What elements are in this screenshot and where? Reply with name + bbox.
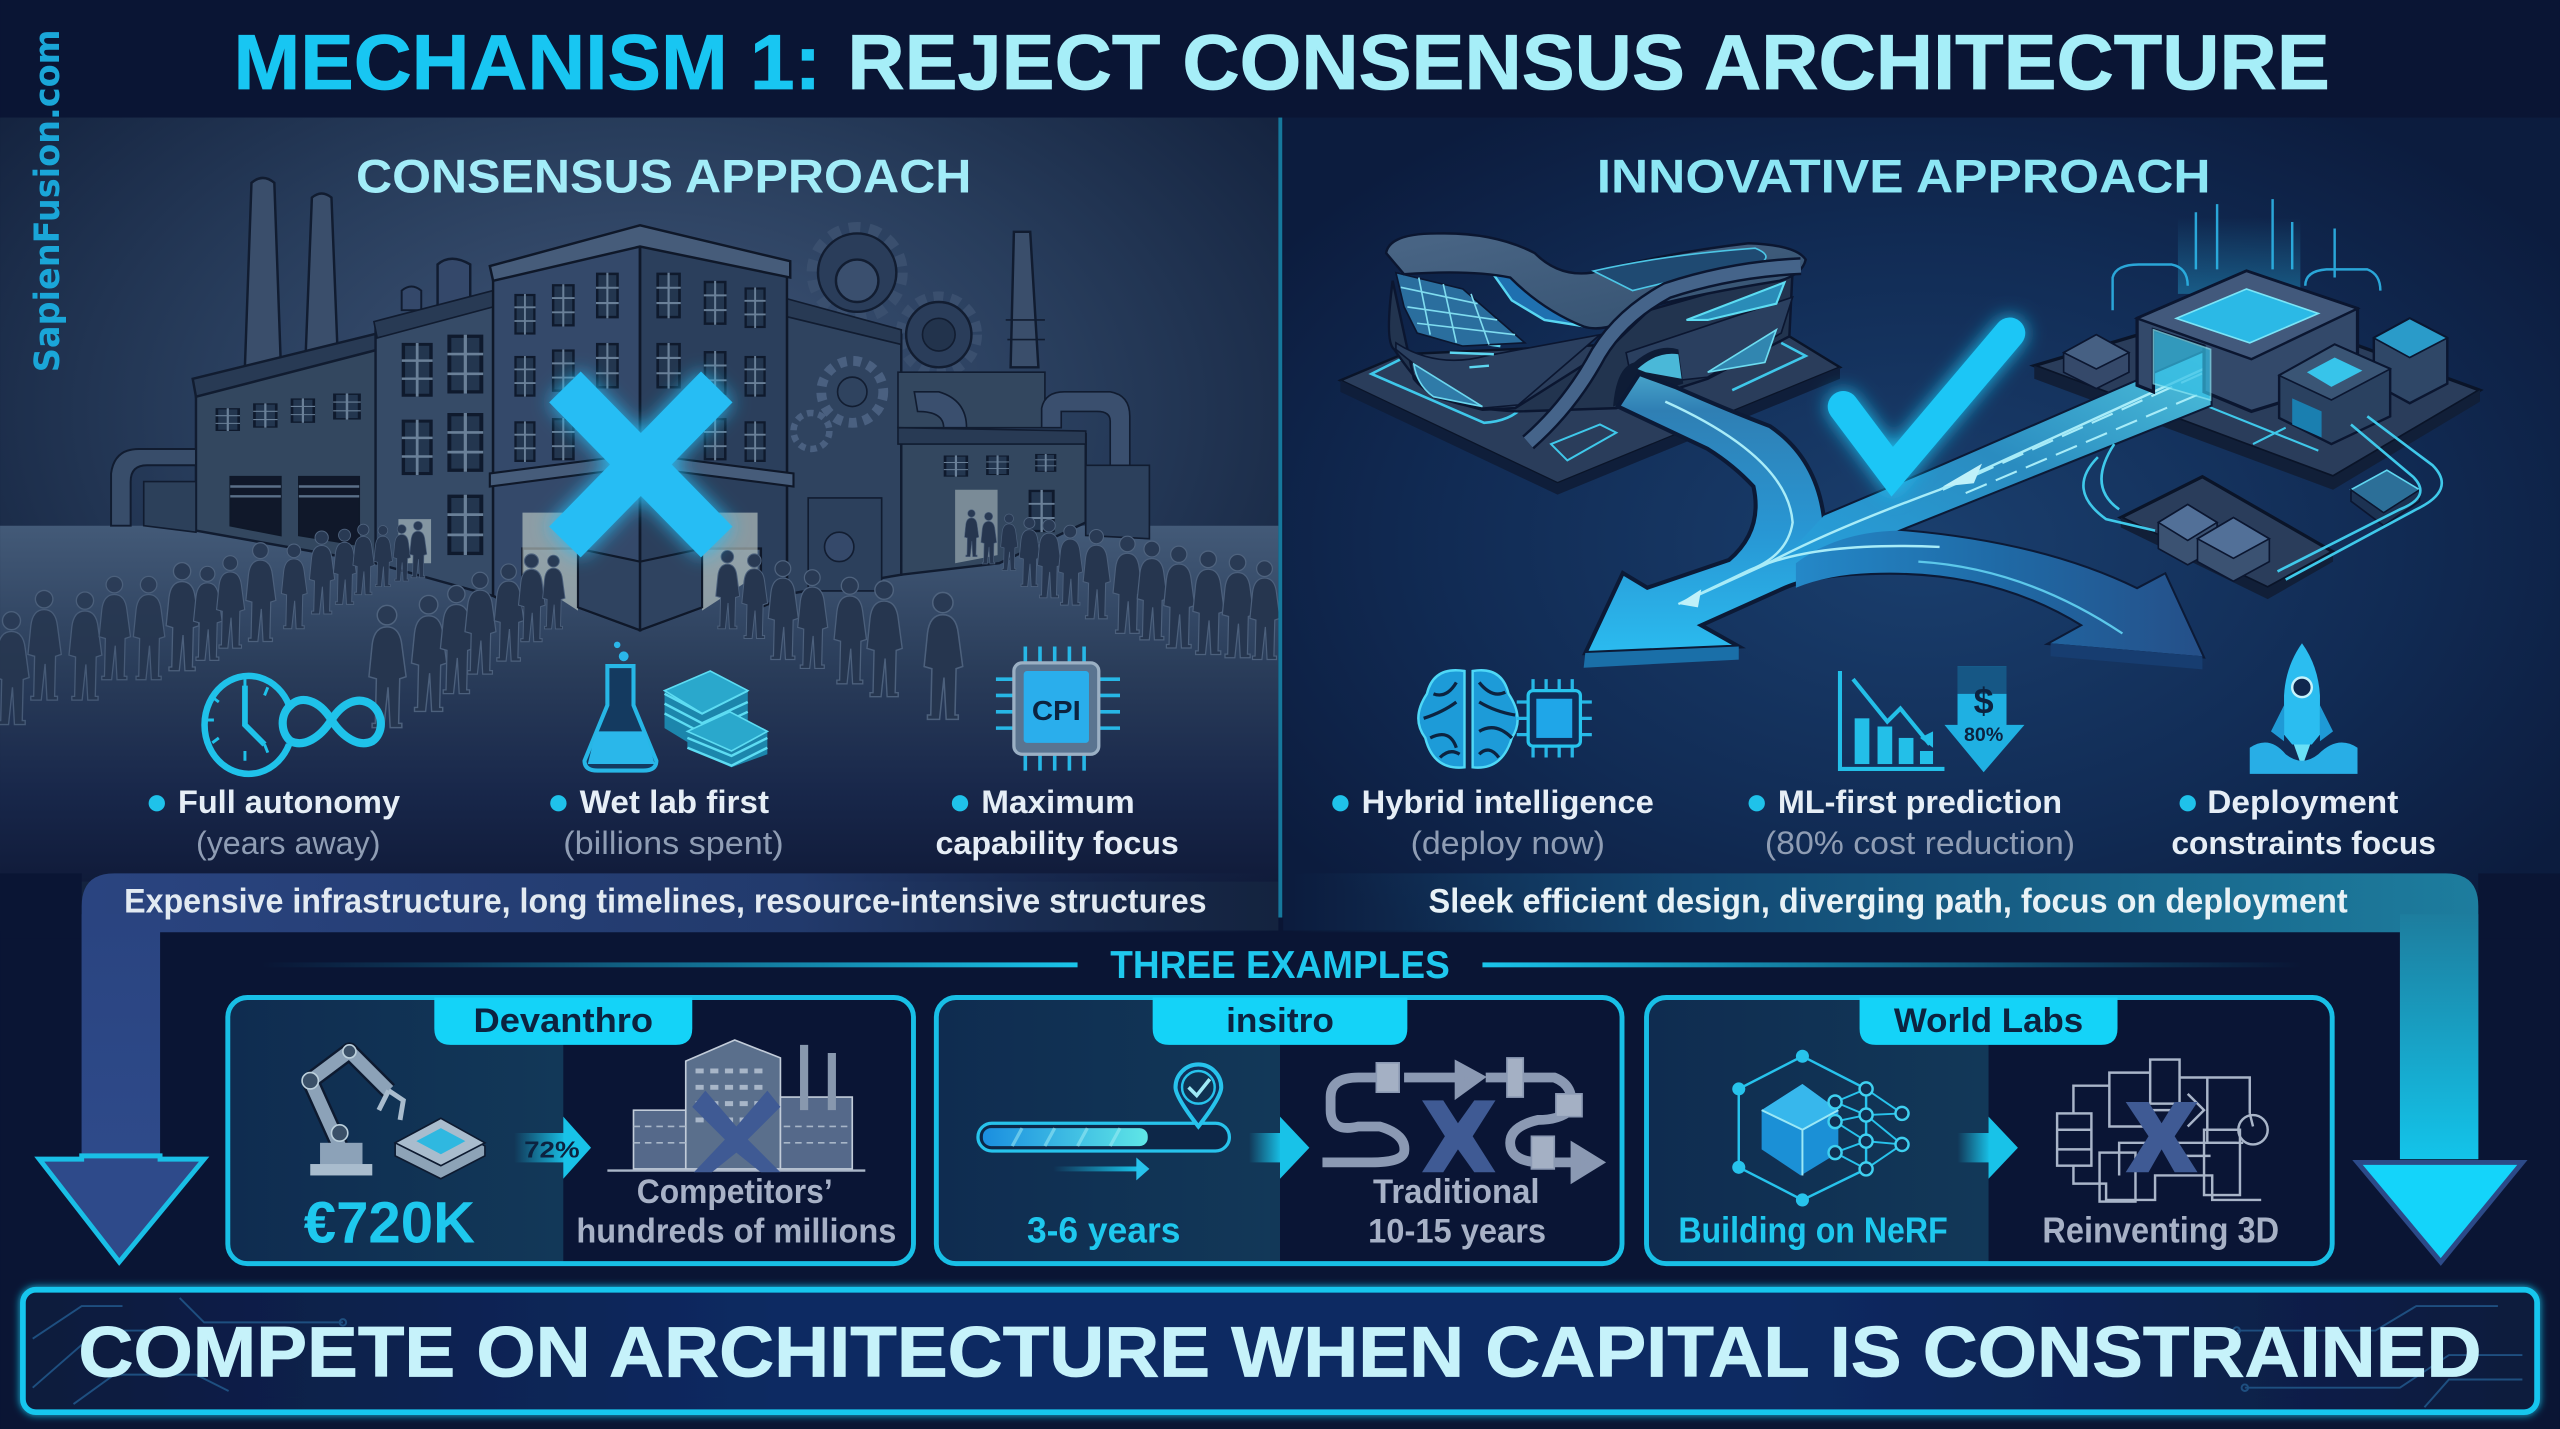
- illustration: isometric data center: [2064, 199, 2447, 581]
- text: right band caption: Sleek efficient design, diverging path, focus on deployment: [1429, 883, 2348, 921]
- label: deployment constraints focus: [2171, 783, 2436, 861]
- label: ml-first prediction: ML-first prediction: [1778, 783, 2062, 820]
- illustration: diverging roads: [1584, 349, 2212, 669]
- text: competitors: hundreds of millions: [576, 1212, 896, 1250]
- icon: location pin check: [1176, 1064, 1221, 1126]
- icon: brain and chip: [1418, 670, 1592, 768]
- text: building on nerf: Building on NeRF: [1678, 1209, 1948, 1250]
- ground plane: [0, 526, 1278, 882]
- text: left band caption: Expensive infrastructure, long timelines, resource-intensive structures: [124, 883, 1207, 921]
- heading: three examples: [261, 944, 2302, 987]
- label: deployment constraints focus: Deployment: [2207, 783, 2398, 820]
- label: wet lab first: (billions spent): [563, 824, 784, 861]
- arrow: left flow down: [39, 873, 1277, 1262]
- icon: rocket: [2250, 643, 2358, 774]
- label: wet lab first: [550, 783, 784, 861]
- left wing: [376, 294, 493, 596]
- label: maximum capability focus: Maximum: [981, 783, 1135, 820]
- title: MECHANISM 1:: [234, 18, 821, 106]
- label: full autonomy: (years away): [196, 824, 380, 861]
- icon: chip box: [395, 1118, 485, 1179]
- far left wing: [196, 336, 379, 563]
- illustration: factory: [111, 178, 1149, 630]
- label: maximum capability focus: [936, 783, 1179, 861]
- arrow: world labs compare: [1958, 1117, 2018, 1179]
- icon: progress bar: [978, 1123, 1229, 1151]
- label: wet lab first: Wet lab first: [580, 783, 769, 820]
- panel: innovative approach: [1283, 118, 2560, 934]
- heading: consensus approach: CONSENSUS APPROACH: [356, 151, 971, 204]
- tab: devanthro: [434, 998, 692, 1045]
- label: hybrid intelligence: (deploy now): [1411, 824, 1605, 861]
- label: maximum capability focus: capability focus: [936, 824, 1179, 861]
- heading: innovative approach: INNOVATIVE APPROACH: [1597, 151, 2211, 204]
- arrow: insitro compare: [1249, 1117, 1309, 1179]
- tab: world labs: World Labs: [1894, 1002, 2083, 1040]
- icon: tangled diagram with x: [2057, 1060, 2268, 1202]
- text: traditional: [1368, 1173, 1546, 1250]
- gears: [813, 229, 976, 372]
- tab: insitro: [1153, 998, 1407, 1045]
- body: [1389, 269, 1793, 411]
- icon: cpi chip: CPI: [1032, 695, 1081, 726]
- label: hybrid intelligence: Hybrid intelligence: [1362, 783, 1654, 820]
- watermark: SapienFusion.com: [28, 29, 68, 372]
- icon: glowing check mark: [1843, 333, 2010, 472]
- far right wing: [898, 372, 1045, 428]
- text: traditional: Traditional: [1373, 1173, 1540, 1211]
- illustration: sleek building: [1340, 233, 1840, 495]
- icon: small arrow: [1053, 1158, 1149, 1180]
- text: competitors: Competitors’: [637, 1173, 833, 1211]
- right wing: [787, 304, 901, 594]
- arrow: 72 percent: 72%: [524, 1137, 580, 1163]
- label: full autonomy: Full autonomy: [178, 783, 400, 820]
- text: compete on architecture: COMPETE ON ARCHITECTURE WHEN CAPITAL IS CONSTRAINED: [78, 1312, 2482, 1392]
- text: competitors: [576, 1173, 896, 1250]
- icon: falling chart and 80 percent arrow: $: [1974, 680, 1994, 721]
- icon: large glowing x: [565, 387, 717, 542]
- label: deployment constraints focus: constraints focus: [2171, 824, 2436, 861]
- label: ml-first prediction: [1749, 783, 2075, 861]
- illustration: data center platforms: [2034, 304, 2480, 599]
- card: insitro: [936, 998, 1622, 1264]
- text: 3-6 years: 3-6 years: [1027, 1209, 1180, 1250]
- illustration: crowd queues: [0, 510, 1280, 728]
- icon: cube and neural net: [1732, 1050, 1909, 1206]
- heading: three examples: THREE EXAMPLES: [1110, 944, 1450, 987]
- circuit traces: [33, 1298, 2522, 1407]
- label: hybrid intelligence: [1332, 783, 1654, 861]
- panel: consensus approach: [0, 118, 1280, 934]
- tab: devanthro: Devanthro: [474, 1002, 653, 1040]
- lower background: [0, 931, 2560, 1429]
- tab: insitro: insitro: [1226, 1002, 1334, 1040]
- icon: cpi chip: [996, 647, 1120, 771]
- title: REJECT CONSENSUS ARCHITECTURE: [847, 18, 2330, 106]
- title: [234, 18, 2330, 106]
- label: ml-first prediction: (80% cost reduction): [1765, 824, 2075, 861]
- central tower: [493, 242, 640, 630]
- icon: falling chart and 80 percent arrow: 80%: [1964, 724, 2003, 746]
- icon: clock and infinity: [204, 676, 381, 774]
- card: world labs: [1647, 998, 2332, 1264]
- panel divider: [1278, 118, 1282, 918]
- icon: factory with x: [607, 1040, 865, 1172]
- text: 720k: €720K: [304, 1190, 475, 1255]
- banner: bottom takeaway: [23, 1290, 2537, 1412]
- card: devanthro: [228, 998, 913, 1264]
- tab: world labs: [1860, 998, 2118, 1045]
- icon: falling chart and 80 percent arrow: [1840, 666, 2024, 772]
- icon: winding pipes with x: [1322, 1058, 1597, 1175]
- label: full autonomy: [149, 783, 400, 861]
- arrow: 72 percent: [514, 1117, 591, 1179]
- icon: flask and money: [585, 642, 767, 771]
- arrow: right flow down: [1290, 873, 2522, 1262]
- icon: robot arm: [302, 1045, 403, 1175]
- text: traditional: 10-15 years: [1368, 1212, 1546, 1250]
- text: reinventing 3d: Reinventing 3D: [2042, 1209, 2279, 1250]
